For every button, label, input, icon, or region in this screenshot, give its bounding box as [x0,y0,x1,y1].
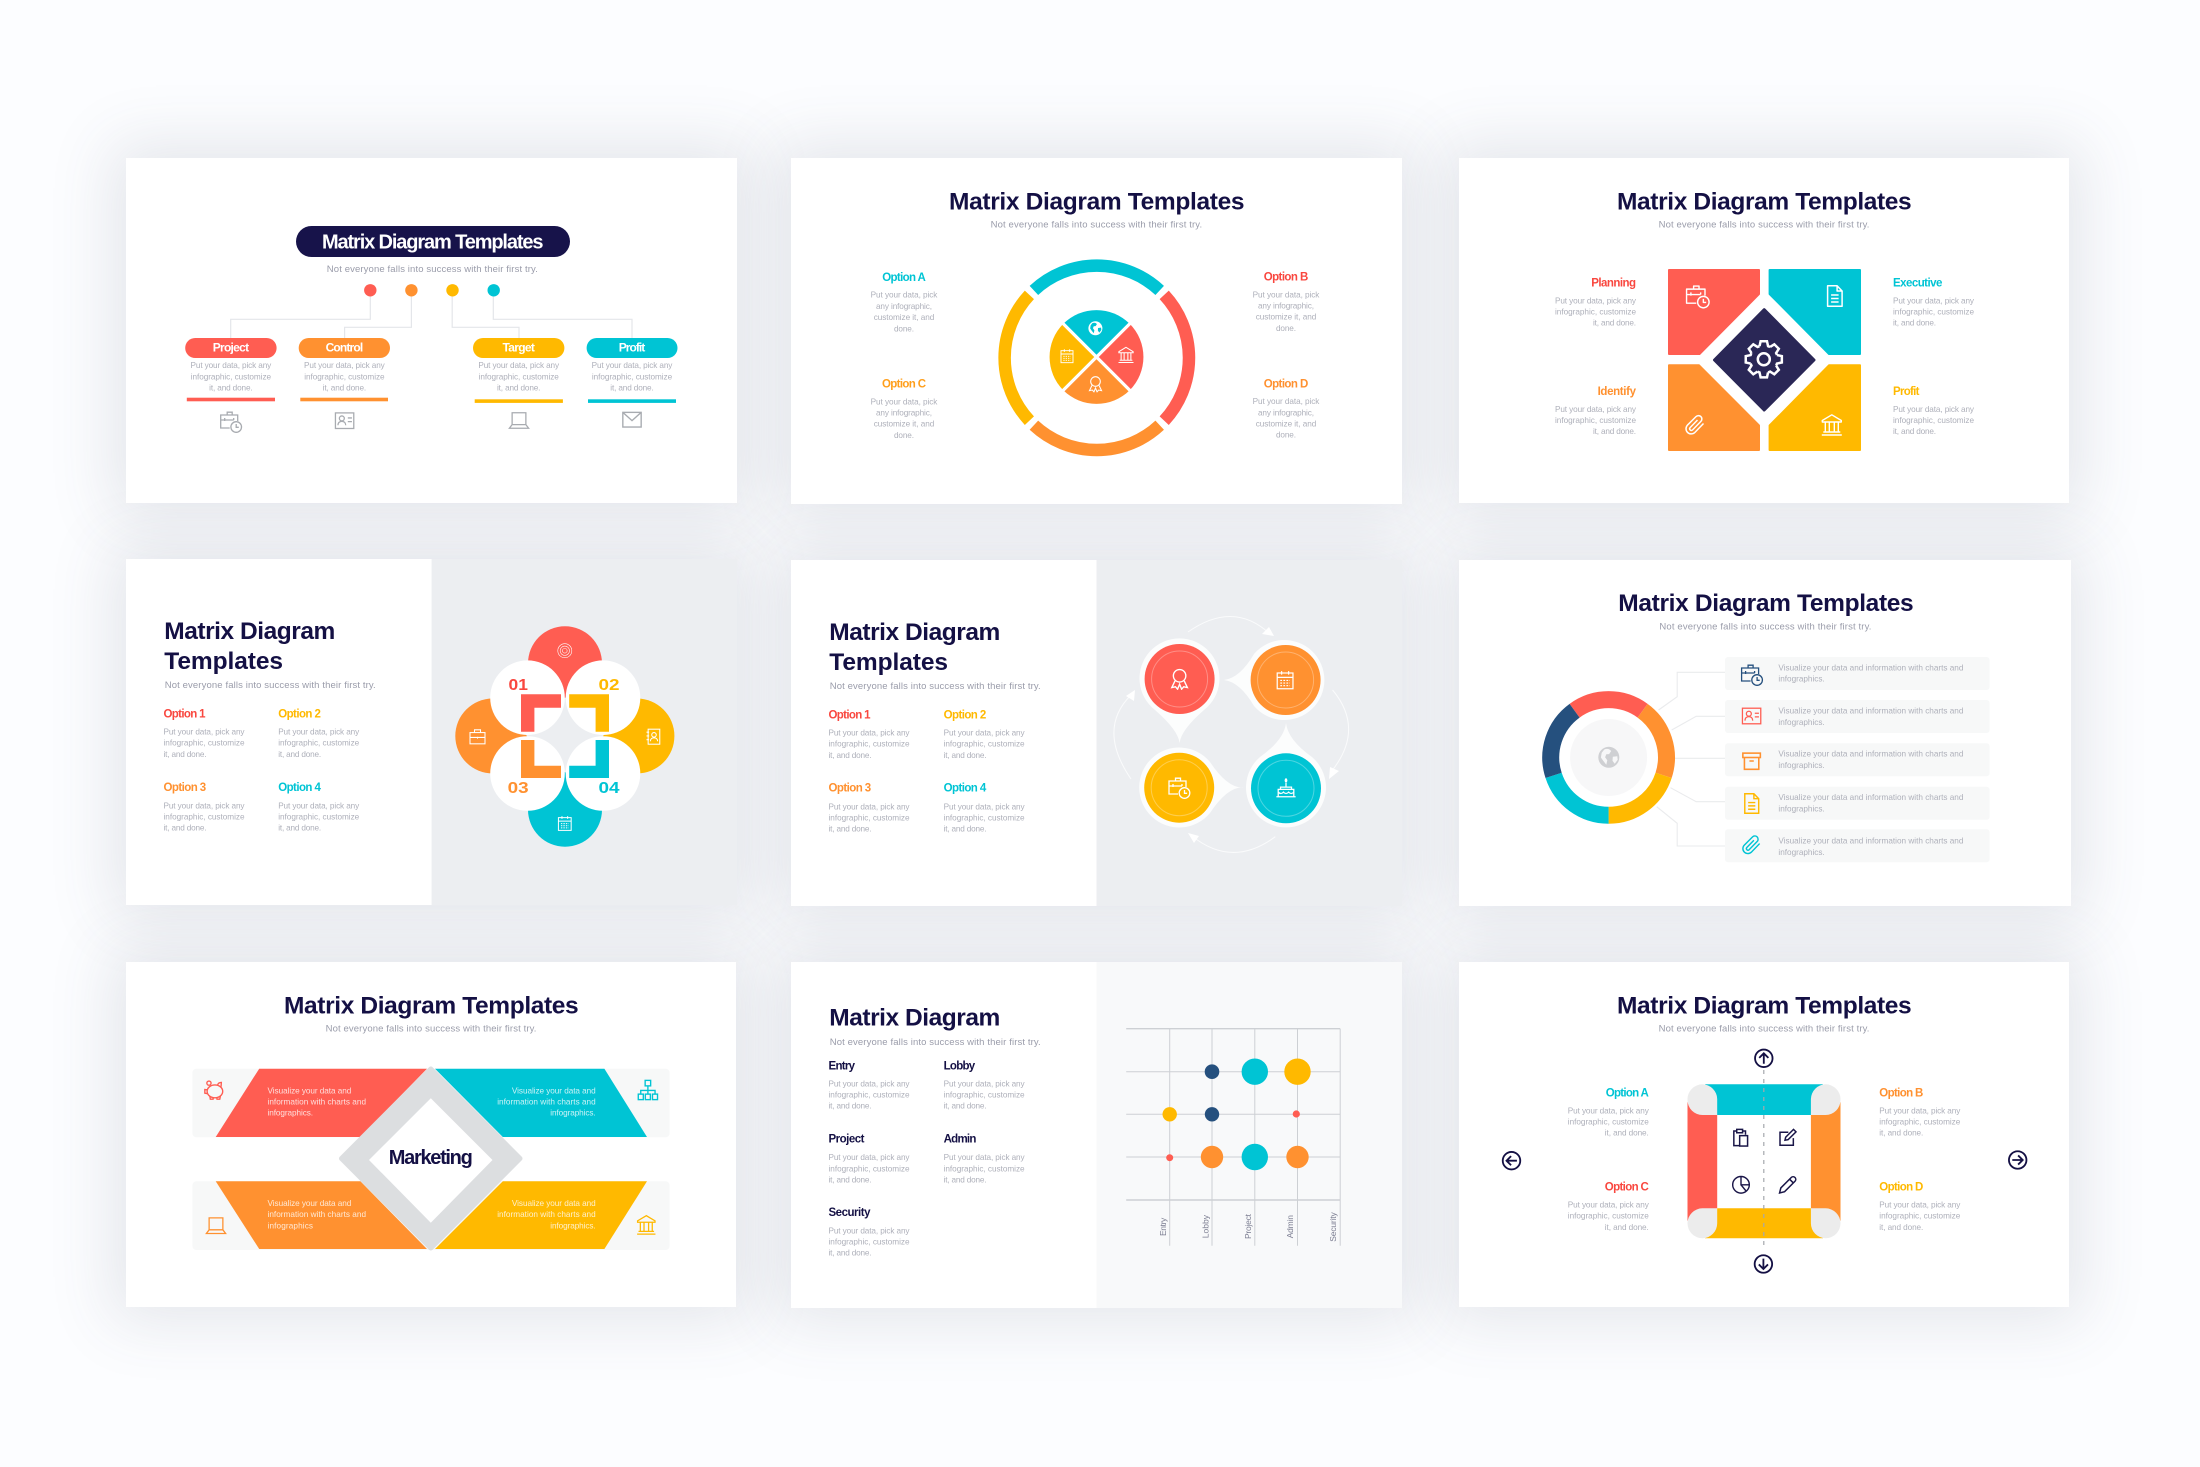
Profit text: it, and done. [1893,427,1936,436]
Executive text: Put your data, pick any [1893,296,1975,305]
center diamond with gear [1714,310,1814,410]
Option 1 text: it, and done. [828,751,872,760]
panel: ring slide [791,158,1402,504]
Option B text [1253,272,1320,333]
title: Matrix Diagram Templates [1617,188,1912,215]
Option 1 text [828,710,910,760]
Profit text: Put your data, pick any [1893,405,1975,414]
Option A text: Option A [882,272,926,284]
Lobby text [944,1060,1026,1111]
Executive text: Executive [1893,278,1942,290]
Option C text: done. [894,431,914,440]
title: Matrix Diagram Templates [1617,992,1912,1019]
subtitle: Not everyone falls into success with their first try. [830,681,1041,692]
Identify text: it, and done. [1593,427,1636,436]
row 5: Visualize your data and information with charts and [1778,837,1964,846]
Planning text: infographic, customize [1555,307,1636,316]
panel: cycle slide [791,560,1402,906]
row 4: infographics. [1778,804,1825,813]
Option 1 text: infographic, customize [164,739,245,748]
title: Templates [164,648,283,675]
Executive text: it, and done. [1893,319,1936,328]
Executive text: infographic, customize [1893,307,1974,316]
row 5: infographics. [1778,848,1825,857]
panel: dot matrix slide [791,962,1402,1308]
Project text: Put your data, pick any [828,1153,910,1162]
Option 4 text: Option 4 [944,783,987,795]
Option D text: Option D [1264,378,1308,390]
Option 1 text [164,709,245,759]
Option B text: any infographic, [1258,302,1314,311]
Option D text: any infographic, [1258,408,1314,417]
Option B text: it, and done. [1879,1129,1923,1138]
Option A text: infographic, customize [1568,1118,1649,1127]
column: Target: it, and done. [497,383,540,392]
Option 1 text: it, and done. [164,750,206,759]
Option D text [1879,1182,1961,1232]
row 5 [1725,829,1990,862]
title [829,619,1000,676]
teal block: infographics. [550,1109,596,1118]
Project text: it, and done. [828,1175,872,1184]
Option 4 text: Put your data, pick any [278,801,360,810]
column: Control: infographic, customize [304,372,385,381]
Option B text: Put your data, pick [1253,290,1320,299]
red block: Visualize your data and [268,1086,352,1095]
numbers: 01 [508,677,528,694]
Option D text: it, and done. [1879,1223,1923,1232]
connector lines [231,296,632,338]
Entry text: Entry [828,1060,856,1072]
Option 4 text: it, and done. [944,825,987,834]
title: Matrix Diagram [829,1005,1000,1032]
column: Profit: it, and done. [610,383,654,392]
Entry text [828,1060,910,1111]
background bands [192,1069,670,1250]
Option B text: Option B [1264,272,1308,284]
column: Project: infographic, customize [191,372,271,381]
Identify text: infographic, customize [1555,416,1636,425]
Option 4 text: it, and done. [278,823,321,832]
matrix grid [1126,1029,1340,1246]
column: Project: Project [213,341,249,355]
column: Profit: Profit [619,341,645,355]
yellow block: Visualize your data and [512,1199,596,1208]
Option B text: done. [1276,324,1296,333]
Lobby text: it, and done. [944,1102,987,1111]
node: yellow [1144,753,1214,823]
Option D text: done. [1276,431,1296,440]
orange block: Visualize your data and [268,1199,352,1208]
matrix quadrants [1669,270,1860,450]
row 2: infographics. [1778,718,1825,727]
subtitle: Not everyone falls into success with their first try. [326,1023,536,1034]
title [164,618,335,675]
teal block: information with charts and [497,1097,596,1106]
corner brackets [521,694,609,778]
panel: diamond quadrant slide [1459,158,2069,503]
column: Control: Control [326,341,363,355]
row 1: infographics. [1778,675,1825,684]
orange block: infographics [268,1221,313,1230]
Lobby text: Lobby [944,1060,976,1072]
panel: marketing slide [126,962,736,1307]
title: Templates [829,649,948,676]
Option 4 text: Put your data, pick any [944,802,1026,811]
column: Target: Target [502,341,535,355]
subtitle: Not everyone falls into success with their first try. [991,220,1202,231]
teal block: Visualize your data and [512,1086,596,1095]
Security text: Security [828,1207,871,1219]
Admin text: Admin [944,1134,976,1146]
rotated axis labels: Project [1243,1213,1253,1239]
column: Project [185,338,277,432]
Profit text: Profit [1893,386,1920,398]
Option 3 text: it, and done. [828,825,872,834]
node: orange [1251,645,1321,715]
Option 2 text: it, and done. [944,751,987,760]
column: Target: Put your data, pick any [478,361,560,370]
subtitle: Not everyone falls into success with their first try. [830,1037,1041,1048]
numbers: 03 [508,780,529,797]
Option 2 text [944,710,1026,760]
row 4: Visualize your data and information with charts and [1778,793,1964,802]
subtitle: Not everyone falls into success with their first try. [165,680,376,691]
orange block [216,1181,427,1249]
yellow block [435,1181,647,1249]
Entry text: infographic, customize [828,1091,910,1100]
Option 1 text: Option 1 [828,710,871,722]
Option A text: any infographic, [876,302,932,311]
yellow block: infographics. [550,1221,596,1230]
node: red [1145,644,1215,714]
Option 1 text: Put your data, pick any [828,729,910,738]
Option 2 text: Put your data, pick any [944,729,1026,738]
Option D text: infographic, customize [1879,1212,1961,1221]
Option C text: customize it, and [874,420,935,429]
rotated axis labels: Admin [1285,1215,1295,1238]
petal icons [470,644,660,830]
column: Target [473,338,564,428]
subtitle: Not everyone falls into success with their first try. [327,264,538,275]
panel: pill title slide [126,158,737,503]
connector lines [1657,672,1725,846]
row 1 [1725,657,1990,690]
center diamond: Marketing: Marketing [389,1147,473,1169]
column: Profit: Put your data, pick any [592,361,673,370]
column: Profit: infographic, customize [592,372,673,381]
row 3: infographics. [1778,761,1825,770]
panel: petal slide [126,559,737,905]
outer ring [1005,266,1189,450]
outer cycle arrows [1114,616,1349,852]
Option C text [1568,1182,1650,1232]
Security text: it, and done. [828,1249,872,1258]
numbers [508,677,620,797]
Option C text: Option C [882,379,926,391]
Option 3 text: Put your data, pick any [828,802,910,811]
Project text: infographic, customize [828,1164,910,1173]
Option C text: it, and done. [1605,1223,1649,1232]
Planning text: Planning [1591,278,1636,290]
white teardrop halos [1139,638,1326,828]
Profit text: infographic, customize [1893,416,1974,425]
Project text: Project [828,1134,865,1146]
Executive text [1893,278,1975,328]
Planning text: it, and done. [1593,319,1636,328]
Option 3 text [164,782,245,832]
Option D text [1253,378,1320,440]
red block [216,1069,427,1137]
Option B text: Put your data, pick any [1879,1106,1961,1115]
title: Matrix Diagram [164,618,335,645]
column: Project: it, and done. [209,383,253,392]
teal block [435,1069,647,1137]
subtitle: Not everyone falls into success with their first try. [1659,622,1871,633]
donut chart [1551,700,1666,815]
Option A text: Option A [1606,1087,1649,1099]
Option 2 text: infographic, customize [944,740,1025,749]
Option 2 text: infographic, customize [278,739,360,748]
subtitle: Not everyone falls into success with their first try. [1659,220,1869,230]
title: Matrix Diagram Templates [284,992,579,1019]
Admin text: it, and done. [944,1175,987,1184]
rotated axis labels [1158,1212,1338,1242]
rotated axis labels: Security [1328,1212,1338,1242]
Admin text: Put your data, pick any [944,1153,1026,1162]
node: teal [1251,753,1321,823]
band icons [205,1080,658,1234]
Profit text [1893,386,1975,436]
orange block: information with charts and [268,1210,366,1219]
Option C text: Put your data, pick any [1568,1201,1650,1210]
row 2 [1725,700,1990,733]
Option 2 text: Put your data, pick any [278,728,360,737]
row 2: Visualize your data and information with charts and [1778,707,1964,716]
Option 3 text [828,783,910,834]
center icons [1733,1129,1796,1193]
Option A text: customize it, and [874,313,935,322]
Option 2 text: it, and done. [278,750,321,759]
numbers: 02 [598,677,620,694]
center pie [1050,310,1143,404]
rotated axis labels: Entry [1158,1217,1168,1236]
Option B text: customize it, and [1256,313,1317,322]
Option 3 text: Option 3 [164,782,206,794]
Security text: infographic, customize [828,1238,910,1247]
Option 4 text [944,783,1026,834]
petals [455,626,674,847]
Option 3 text: it, and done. [164,823,206,832]
Option C text: infographic, customize [1568,1212,1649,1221]
red block: infographics. [268,1109,313,1118]
rotated axis labels: Lobby [1200,1214,1210,1238]
column: Control: it, and done. [323,383,366,392]
Option D text: Option D [1879,1182,1923,1194]
column: Control: Put your data, pick any [304,361,386,370]
Option 4 text: Option 4 [278,782,321,794]
Identify text: Put your data, pick any [1555,405,1637,414]
Project text [828,1134,910,1184]
Planning text: Put your data, pick any [1555,296,1637,305]
Option A text [1568,1087,1650,1138]
Identify text [1555,386,1637,436]
title: Matrix Diagram Templates [1618,590,1914,617]
Security text [828,1207,910,1258]
dashed axis [1763,1070,1765,1250]
Option 1 text: Put your data, pick any [164,728,245,737]
Entry text: Put your data, pick any [828,1079,910,1088]
Security text: Put your data, pick any [828,1226,910,1235]
direction arrows [1503,1050,2026,1273]
Entry text: it, and done. [828,1102,872,1111]
Option D text: Put your data, pick [1253,397,1320,406]
title pill [296,226,570,257]
column: Control [299,338,390,428]
Option 3 text: infographic, customize [828,813,910,822]
Admin text [944,1134,1026,1184]
Lobby text: Put your data, pick any [944,1079,1026,1088]
Option C text: Put your data, pick [871,397,938,406]
column: Target: infographic, customize [479,372,559,381]
Option B text: Option B [1879,1087,1923,1099]
panel: donut list slide [1459,560,2071,906]
Option 1 text: Option 1 [164,709,206,721]
Option 3 text: infographic, customize [164,812,245,821]
yellow block: information with charts and [497,1210,596,1219]
Option A text: Put your data, pick any [1568,1106,1650,1115]
Option 4 text: infographic, customize [944,813,1025,822]
row 4 [1725,787,1990,820]
Option 1 text: infographic, customize [828,740,910,749]
Option 2 text [278,709,360,759]
white circles [490,660,640,811]
Option 2 text: Option 2 [278,709,321,721]
title pill: Matrix Diagram Templates [322,232,544,254]
row 3: Visualize your data and information with charts and [1778,750,1964,759]
Option 3 text: Option 3 [828,783,871,795]
title: Matrix Diagram Templates [949,188,1244,215]
numbers: 04 [598,780,620,797]
Option D text: Put your data, pick any [1879,1201,1961,1210]
Planning text [1555,278,1637,328]
Option A text: it, and done. [1605,1129,1649,1138]
subtitle: Not everyone falls into success with their first try. [1659,1023,1869,1034]
Option 3 text: Put your data, pick any [164,801,245,810]
row 3 [1725,743,1990,776]
Option 4 text [278,782,360,832]
status dots [364,284,500,296]
Option A text [871,272,938,333]
red block: information with charts and [268,1097,366,1106]
Option 2 text: Option 2 [944,710,986,722]
Option A text: Put your data, pick [871,291,938,300]
center diamond: Marketing [342,1069,520,1248]
Admin text: infographic, customize [944,1164,1025,1173]
matrix dots [1162,1058,1311,1170]
column: Profit [587,338,678,427]
Lobby text: infographic, customize [944,1091,1025,1100]
Identify text: Identify [1598,386,1637,398]
Option A text: done. [894,324,914,333]
Option C text [871,379,938,440]
panel: square frame slide [1459,962,2069,1307]
Option C text: any infographic, [876,409,932,418]
Option B text: infographic, customize [1879,1118,1961,1127]
title: Matrix Diagram [829,619,1000,646]
Option C text: Option C [1605,1182,1649,1194]
Option 4 text: infographic, customize [278,812,360,821]
column: Project: Put your data, pick any [191,361,272,370]
Option B text [1879,1087,1961,1138]
Option D text: customize it, and [1256,419,1317,428]
square frame [1688,1084,1840,1238]
row 1: Visualize your data and information with charts and [1778,663,1964,672]
